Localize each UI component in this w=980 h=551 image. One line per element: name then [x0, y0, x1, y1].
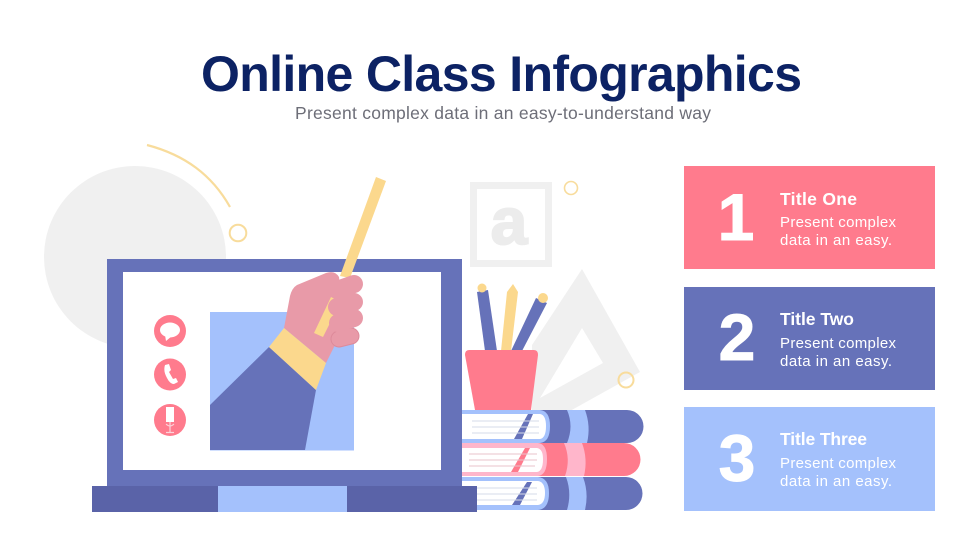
icon: letter a tile: a	[491, 184, 529, 258]
panel: title two: data in an easy.	[780, 353, 892, 370]
cuff	[269, 328, 326, 390]
icon: pencils	[477, 284, 548, 351]
panel: title two: Title Two	[780, 309, 854, 329]
decorative arc	[147, 145, 230, 207]
panel: title one: 1	[718, 180, 754, 254]
laptop base	[92, 486, 477, 512]
book: bottom	[462, 477, 643, 510]
panel: title one: Present complex	[780, 214, 896, 231]
icon: pencil cup	[465, 350, 538, 410]
panel: title three: data in an easy.	[780, 473, 892, 490]
panel: title one: data in an easy.	[780, 232, 892, 249]
icon: chat	[154, 315, 186, 347]
icon: letter a tile	[474, 184, 548, 264]
laptop	[92, 259, 477, 512]
pointer stick back	[340, 177, 386, 278]
panel: title three: Title Three	[780, 429, 867, 449]
sleeve	[210, 347, 316, 450]
video tile background	[210, 312, 354, 450]
illustration: arm holding pointer	[210, 177, 386, 450]
laptop screen frame	[107, 259, 462, 487]
book: middle	[462, 443, 641, 476]
panel: title three	[684, 407, 935, 511]
laptop screen	[123, 272, 441, 470]
panel: title three: 3	[719, 421, 755, 495]
fingers	[337, 284, 354, 339]
book: top	[462, 410, 644, 443]
panel: title three: Present complex	[780, 455, 896, 472]
books stack	[462, 410, 644, 510]
icon: set square	[532, 269, 640, 411]
panel: title one: Title One	[780, 189, 857, 209]
panel: title one	[684, 166, 935, 269]
panel: title two: 2	[719, 300, 755, 374]
panel: title two: Present complex	[780, 335, 896, 352]
decorative ring right	[618, 372, 634, 388]
subtitle: Present complex data in an easy-to-understand way	[295, 103, 711, 123]
decorative ring left	[230, 225, 246, 241]
panel: title two	[684, 287, 935, 390]
icon: microphone	[154, 404, 186, 436]
decorative ring top	[564, 182, 578, 194]
background circle	[44, 166, 226, 348]
title: Online Class Infographics	[201, 46, 802, 102]
pointer stick front	[314, 297, 341, 337]
icon: phone	[154, 358, 186, 390]
hand palm	[284, 272, 346, 363]
